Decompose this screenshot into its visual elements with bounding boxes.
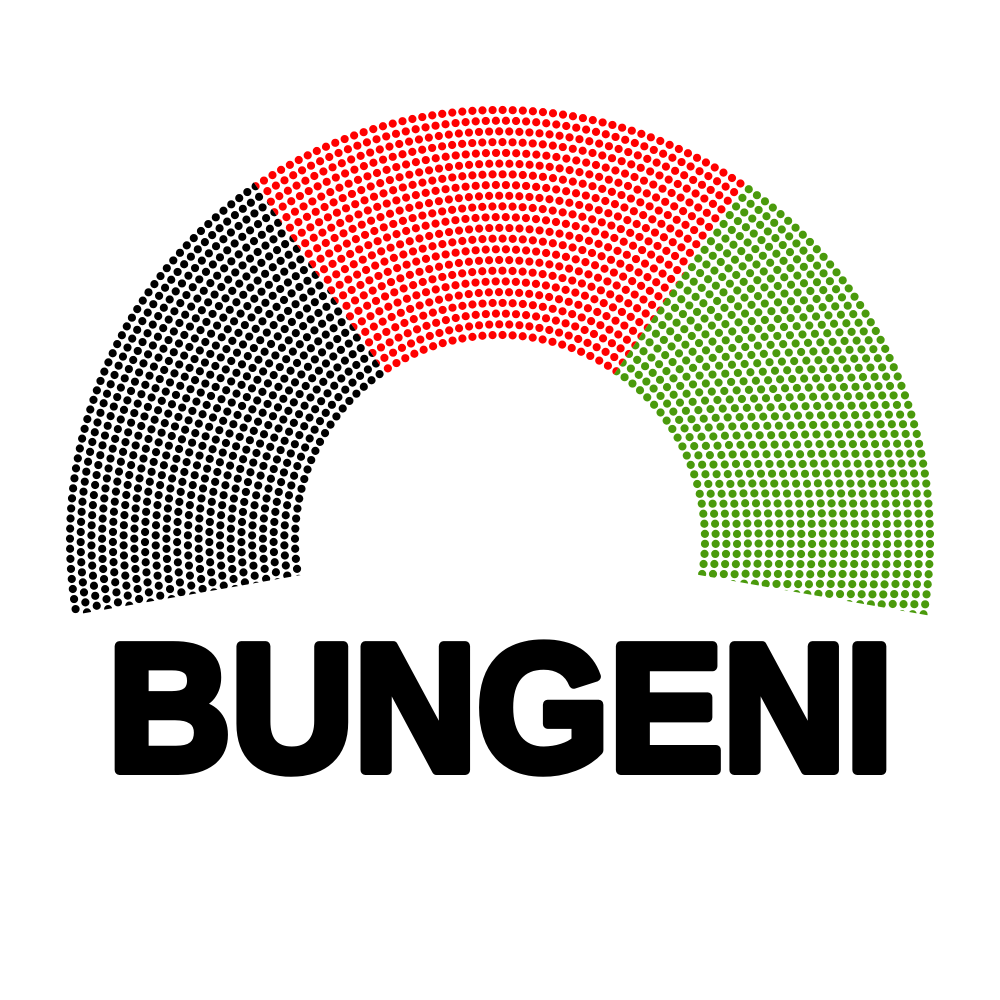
title: BUNGENI <box>108 608 893 809</box>
seats: red bloc <box>254 106 744 374</box>
seats: green bloc <box>614 185 934 616</box>
seats: black bloc <box>66 182 384 614</box>
chart: parliament seat arc <box>66 106 934 616</box>
